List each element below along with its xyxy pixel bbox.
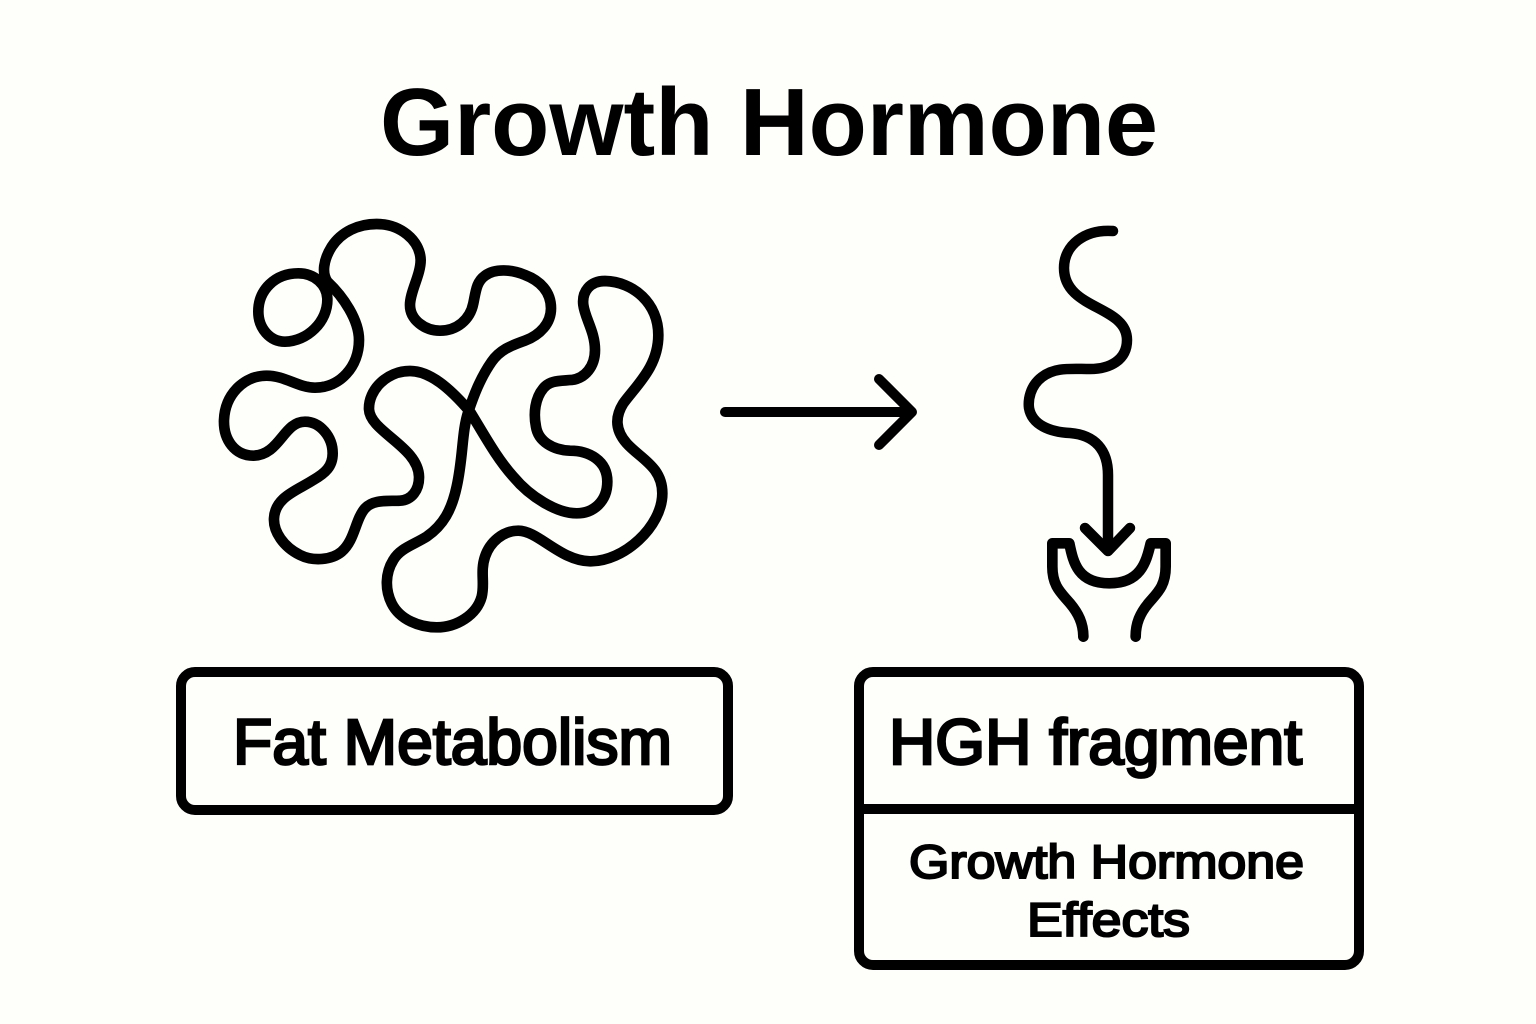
label: Growth Hormone Effects [909, 835, 1304, 946]
label: Fat Metabolism: Fat Metabolism [233, 706, 672, 778]
label: HGH fragment: HGH fragment [889, 706, 1302, 778]
icon: folded protein chain [224, 224, 662, 627]
panel: Fat Metabolism [181, 672, 728, 810]
icon: receptor [1052, 543, 1166, 637]
title: Growth Hormone [380, 69, 1158, 176]
icon: HGH fragment chain with arrow [1029, 231, 1130, 551]
panel: HGH fragment [859, 672, 1359, 965]
label: Growth Hormone Effects: Effects [1027, 893, 1190, 946]
arrow: protein to fragment [725, 379, 912, 445]
label: Growth Hormone Effects: Growth Hormone [909, 835, 1304, 888]
